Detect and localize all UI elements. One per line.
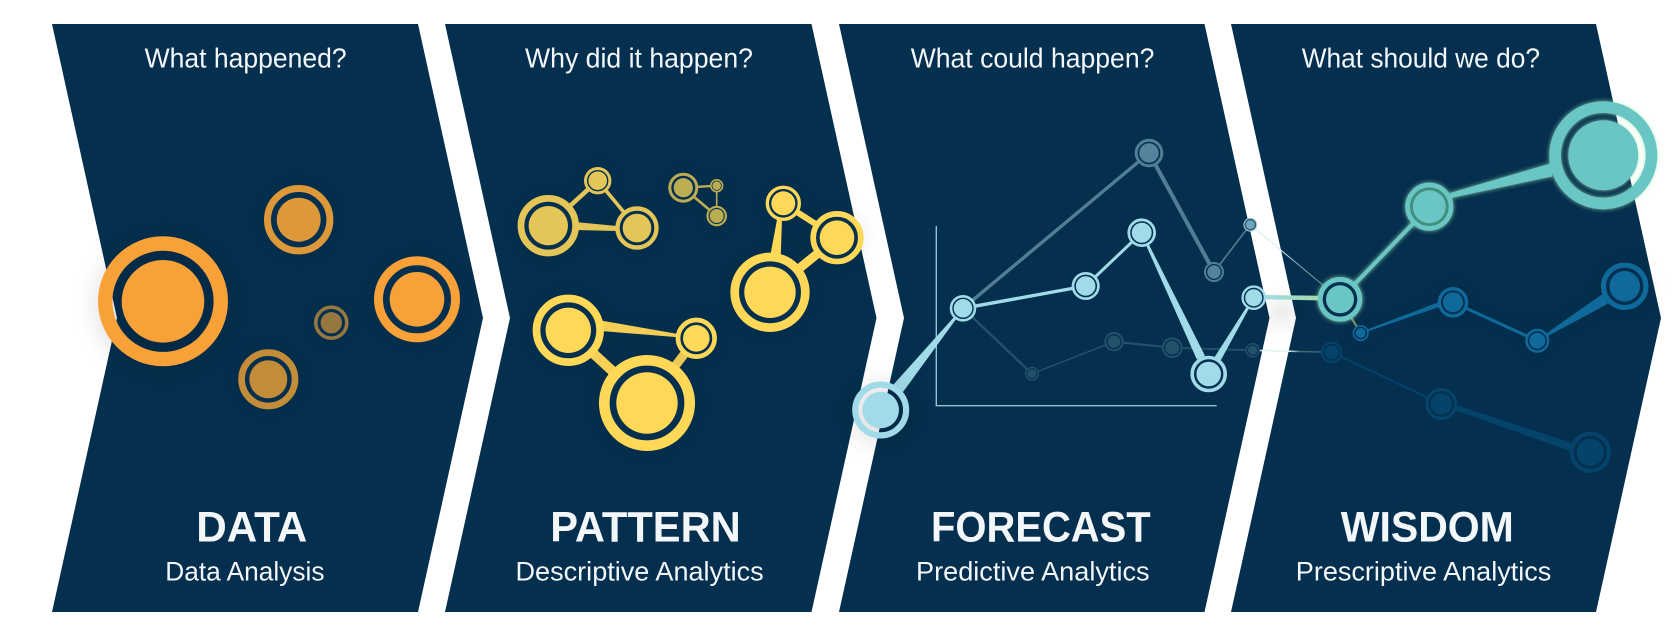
cluster: upper left triangle <box>521 168 656 253</box>
label: pattern: Descriptive Analytics <box>516 557 764 587</box>
panel: forecast chevron <box>839 24 1270 612</box>
label: wisdom <box>1296 505 1551 587</box>
node: middle teal node <box>1408 185 1451 228</box>
chart axes <box>936 226 1217 406</box>
heading: what happened: What happened? <box>145 42 347 74</box>
panel: pattern chevron <box>445 24 876 612</box>
node: large teal end node <box>1555 107 1652 204</box>
node: first teal node <box>1320 280 1360 319</box>
label: wisdom: Prescriptive Analytics <box>1296 557 1551 587</box>
dot: small brown <box>316 307 347 338</box>
scattered data dots <box>105 188 455 406</box>
label: data: DATA <box>196 505 307 552</box>
dot: right orange <box>378 261 456 338</box>
cluster: right triangle <box>735 187 861 328</box>
heading: what should we do: What should we do? <box>1302 42 1540 74</box>
label: forecast: Predictive Analytics <box>916 557 1150 587</box>
cluster: small top triangle <box>670 174 726 225</box>
label: forecast: FORECAST <box>931 505 1151 552</box>
soft shadow in the gap between forecast and wisdom <box>1252 286 1312 338</box>
heading: why did it happen: Why did it happen? <box>525 42 753 74</box>
label: data <box>165 505 324 587</box>
cluster: lower triangle <box>536 298 715 446</box>
label: wisdom: WISDOM <box>1341 505 1514 552</box>
line: mid-tone upper forecast branch <box>963 140 1361 333</box>
panel: data chevron <box>52 24 483 612</box>
dot: bottom ochre <box>242 353 295 406</box>
dot: top orange <box>268 188 330 251</box>
label: pattern: PATTERN <box>550 505 741 552</box>
panel: wisdom chevron <box>1231 24 1661 612</box>
node: large start node <box>855 385 906 435</box>
pattern clusters <box>521 168 861 446</box>
label: pattern <box>516 505 764 587</box>
label: data: Data Analysis <box>165 557 324 587</box>
line: bright forecast series <box>855 220 1322 435</box>
heading: what could happen: What could happen? <box>911 42 1154 74</box>
line: teal wisdom series <box>1320 107 1652 319</box>
dot: large orange <box>105 243 221 359</box>
line: blue wisdom series <box>1354 265 1646 352</box>
line: faded dark blue wisdom series <box>1322 343 1609 471</box>
label: forecast <box>916 505 1151 587</box>
line: dark lower forecast branch <box>963 308 1332 380</box>
